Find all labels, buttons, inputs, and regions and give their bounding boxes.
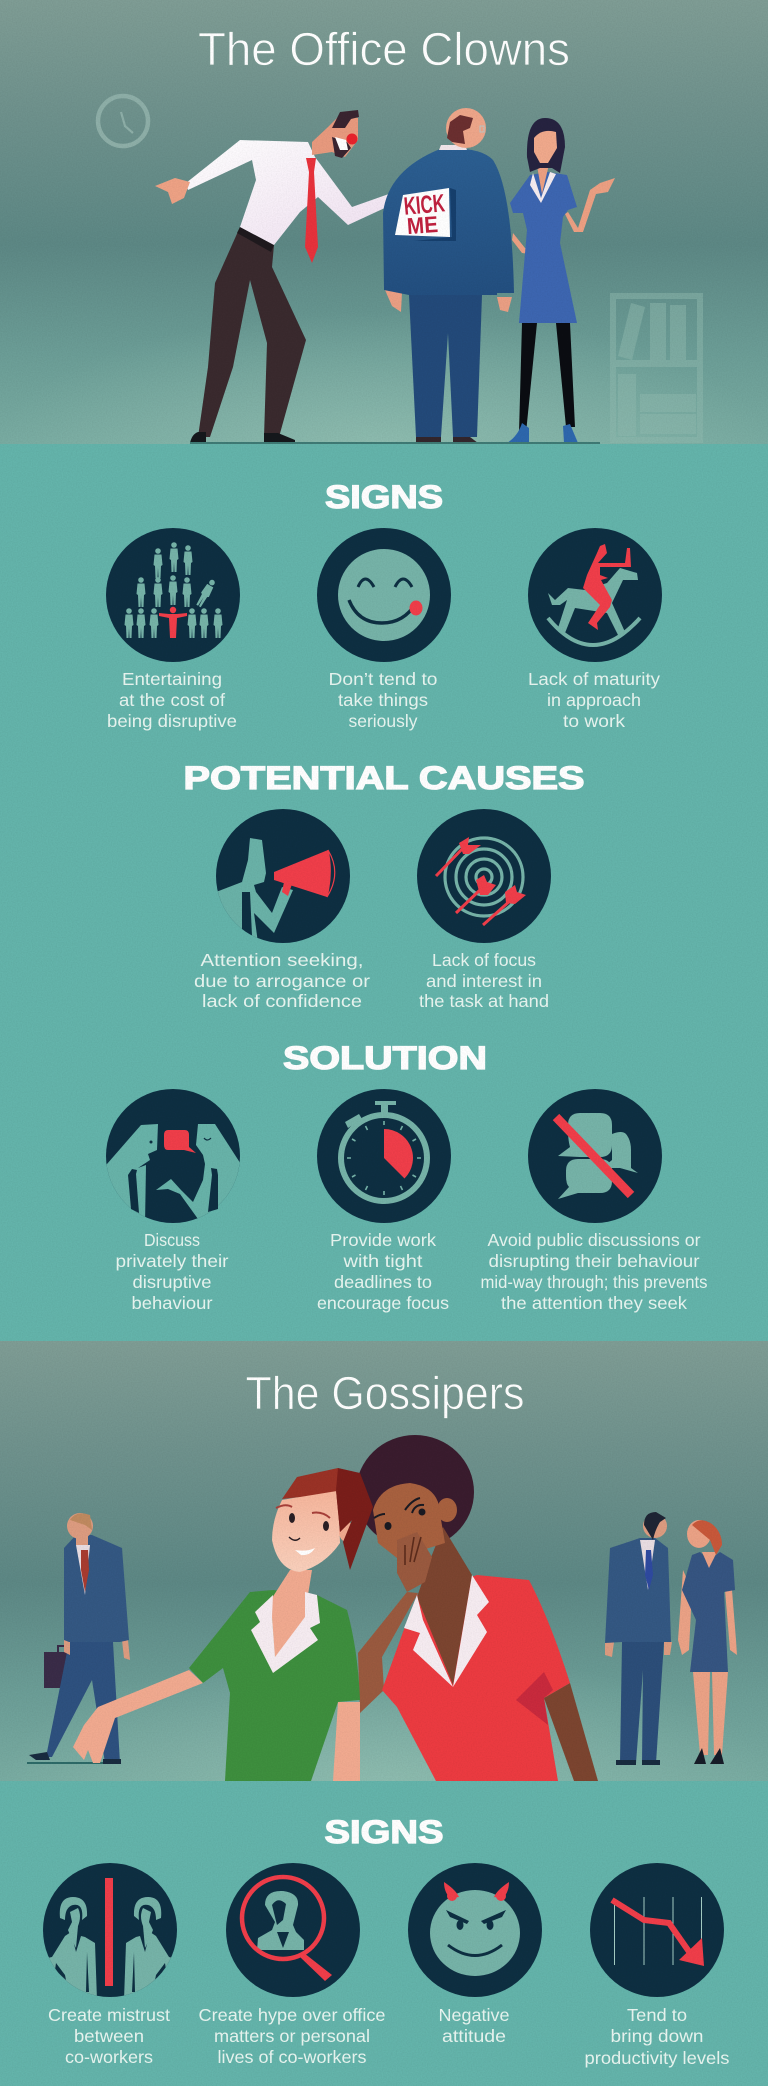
label: disruptive	[132, 1272, 212, 1292]
heading: solution: SOLUTION	[283, 1040, 487, 1076]
icon: two people talking	[100, 1089, 246, 1225]
title: office clowns: The Office Clowns	[198, 23, 570, 75]
left arm	[358, 1592, 418, 1713]
panel: office clowns hero	[0, 0, 768, 444]
heading: potential causes: POTENTIAL CAUSES	[184, 760, 584, 796]
label: between	[74, 2026, 144, 2046]
label	[480, 1230, 708, 1313]
label: seriously	[348, 711, 418, 731]
icon: wall clock	[98, 96, 148, 146]
gossip sign 3: negative attitude	[408, 1863, 542, 2046]
icon: crossed-out speech bubbles	[528, 1089, 662, 1223]
neck and head	[312, 115, 358, 157]
icon: two women separated by bar	[38, 1863, 183, 2000]
red dress	[382, 1575, 570, 1781]
figure: green shirt woman	[73, 1468, 373, 1781]
sign: kick me: KICK	[403, 189, 446, 221]
gossip sign 4: productivity	[584, 1863, 730, 2068]
label: Lack of focus	[432, 950, 536, 970]
sign 3: immaturity	[528, 528, 662, 731]
icon: rocking horse	[528, 528, 662, 662]
figure: red dress woman whispering	[356, 1435, 598, 1781]
label: Create mistrust	[48, 2005, 170, 2025]
panel: gossipers hero	[0, 1341, 768, 1781]
hand on sign	[400, 183, 422, 200]
figure: man in right couple	[605, 1512, 672, 1765]
label: take things	[338, 690, 428, 710]
label: deadlines to	[334, 1272, 432, 1292]
figure: woman in blue dress	[507, 118, 615, 443]
gossip sign 1: mistrust	[38, 1863, 183, 2067]
label	[116, 1230, 229, 1313]
gossip sign 2: hype	[198, 1863, 386, 2067]
hand	[397, 1532, 432, 1592]
icon: magnifying glass on woman	[226, 1863, 360, 1997]
cause 1: attention seeking	[194, 809, 370, 1011]
label: Create hype over office	[198, 2005, 386, 2025]
right arm	[544, 1683, 598, 1781]
label	[528, 669, 660, 731]
label: lack of confidence	[202, 991, 362, 1011]
label: mid-way through; this prevents	[480, 1272, 708, 1292]
icon: crowd with red figure	[106, 528, 240, 662]
solution 1: discuss privately	[100, 1089, 246, 1313]
right arm	[333, 1702, 360, 1781]
figure: man with briefcase	[27, 1513, 130, 1764]
icon: target with darts	[417, 809, 551, 943]
label: being disruptive	[107, 711, 237, 731]
label: at the cost of	[119, 690, 225, 710]
label: Lack of maturity	[528, 669, 660, 689]
label: with tight	[342, 1251, 423, 1271]
label: the attention they seek	[501, 1293, 687, 1313]
label: lives of co-workers	[218, 2047, 367, 2067]
heading: signs: SIGNS	[325, 479, 443, 515]
label: Don’t tend to	[328, 669, 438, 689]
label: behaviour	[132, 1293, 213, 1313]
label: Avoid public discussions or	[488, 1230, 701, 1250]
solution 2: tight deadlines	[317, 1089, 451, 1313]
label	[198, 2005, 386, 2067]
label: co-workers	[65, 2047, 153, 2067]
face	[272, 1490, 340, 1572]
label: Discuss	[144, 1230, 200, 1250]
hair	[282, 1468, 352, 1532]
figure: bald man in suit	[383, 108, 514, 443]
label: Tend to	[627, 2005, 687, 2025]
label: to work	[563, 711, 625, 731]
face	[373, 1483, 445, 1558]
sign 1: entertaining	[106, 528, 240, 731]
label: matters or personal	[214, 2026, 370, 2046]
icon: person with megaphone	[216, 809, 350, 943]
icon: falling chart arrow	[590, 1863, 724, 1997]
label: Provide work	[330, 1230, 436, 1250]
green shirt	[189, 1590, 360, 1781]
neck and chest	[417, 1527, 472, 1685]
icon: bookshelf	[610, 293, 703, 443]
label	[107, 669, 237, 731]
collar	[404, 1575, 489, 1687]
label: disrupting their behaviour	[488, 1251, 700, 1271]
label: and interest in	[426, 971, 542, 991]
sign: kick me: ME	[406, 211, 439, 239]
label: attitude	[442, 2026, 506, 2046]
label	[419, 950, 549, 1011]
label: in approach	[547, 690, 641, 710]
icon: devil face	[408, 1863, 542, 1997]
label: productivity levels	[584, 2048, 730, 2068]
label	[194, 950, 370, 1011]
neck and chest	[272, 1570, 312, 1660]
label: due to arrogance or	[194, 971, 370, 991]
label: Negative	[438, 2005, 510, 2025]
icon: smiley with tongue	[317, 528, 451, 662]
label	[438, 2005, 510, 2046]
title: gossipers: The Gossipers	[246, 1367, 524, 1419]
label: privately their	[116, 1251, 229, 1271]
shirt and arms	[186, 140, 402, 245]
sign 2: not serious	[317, 528, 451, 731]
figure: woman in right couple	[678, 1520, 737, 1764]
cause 2: lack of focus	[417, 809, 551, 1011]
label	[584, 2005, 730, 2068]
label: bring down	[610, 2026, 704, 2046]
sign: kick me	[395, 188, 456, 241]
label	[317, 1230, 449, 1313]
solution 3: avoid public discussion	[480, 1089, 708, 1313]
collar	[251, 1592, 320, 1673]
label	[48, 2005, 170, 2067]
trousers	[198, 227, 306, 437]
label: Attention seeking,	[200, 950, 364, 970]
label: Entertaining	[122, 669, 222, 689]
red nose	[346, 134, 358, 144]
label: encourage focus	[317, 1293, 449, 1313]
afro	[356, 1435, 474, 1549]
figure: clown man	[155, 110, 422, 443]
label	[328, 669, 438, 731]
ground shadow	[190, 442, 600, 444]
icon: stopwatch	[317, 1089, 451, 1223]
tie	[305, 158, 318, 263]
left arm	[73, 1670, 203, 1763]
heading: signs (gossipers): SIGNS	[324, 1814, 444, 1850]
eyes and smile	[289, 1513, 295, 1523]
hand left	[155, 178, 190, 204]
label: the task at hand	[419, 991, 549, 1011]
